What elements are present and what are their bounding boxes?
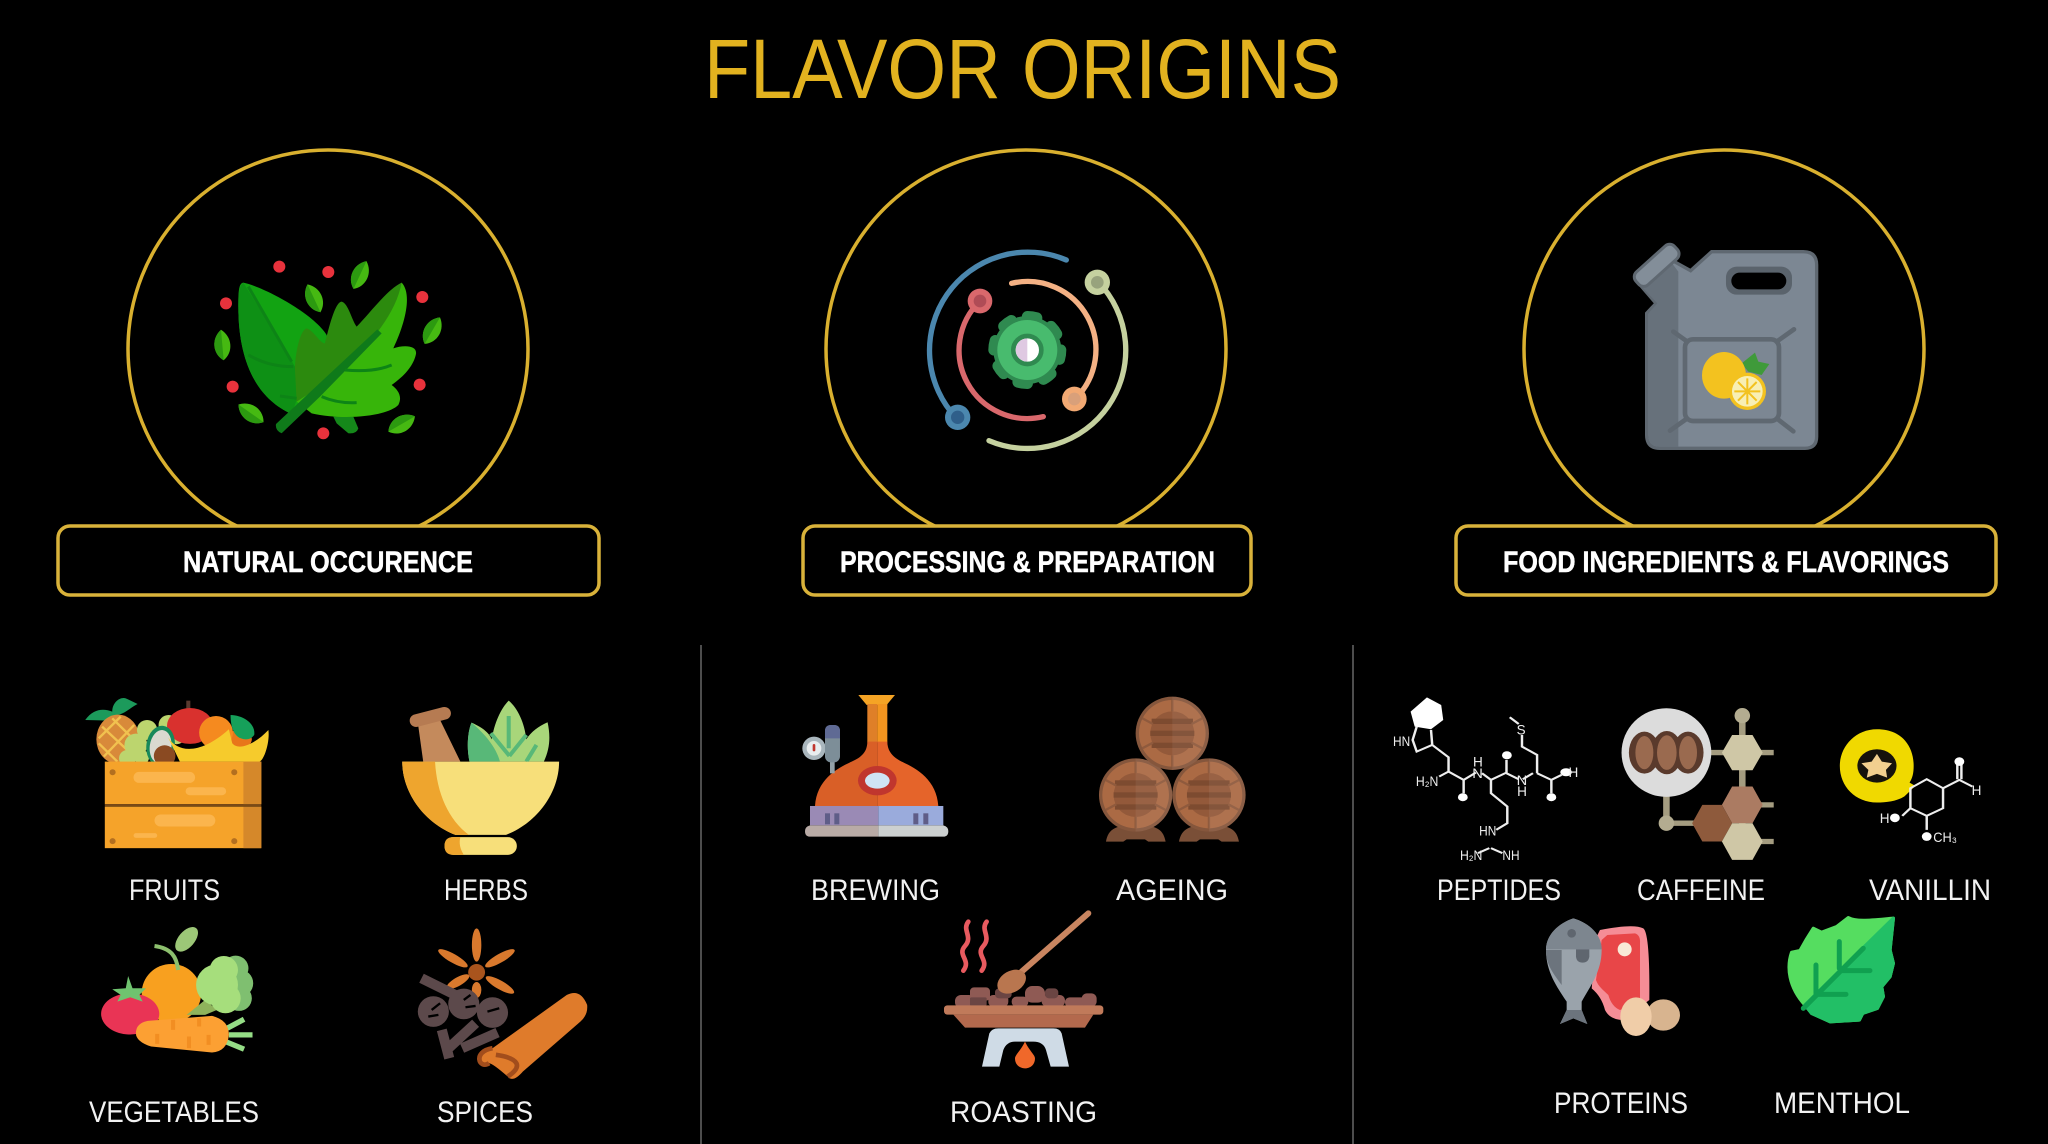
icon: brewing kettle: [802, 695, 948, 837]
icon: roasting pan: [944, 913, 1103, 1068]
icon: peptide molecule: N: [1517, 773, 1527, 788]
title: FLAVOR ORIGINS: [704, 22, 1341, 116]
icon: ageing barrels: [1099, 697, 1246, 842]
icon: peptide molecule: HN: [1393, 734, 1410, 750]
icon: peptide molecule: H₂N: [1460, 849, 1482, 864]
category label: processing and preparation: [803, 526, 1251, 595]
category label: food ingredients and flavorings: [1456, 526, 1996, 595]
icon: peptide molecule: H₂N: [1416, 774, 1438, 789]
icon: spices: [418, 928, 587, 1079]
icon: jerry can with lemon: [1632, 241, 1817, 448]
label: brewing: BREWING: [811, 874, 940, 907]
label: ageing: AGEING: [1116, 874, 1228, 907]
group: natural occurence items: [85, 698, 587, 1129]
label: caffeine: CAFFEINE: [1637, 874, 1765, 907]
label: spices: SPICES: [437, 1096, 533, 1129]
icon: herbs mortar: [402, 701, 559, 855]
icon: peptide molecule: H: [1473, 755, 1483, 770]
icon: vanillin: H: [1972, 783, 1981, 798]
category label: processing and preparation: PROCESSING & PREPARATION: [840, 546, 1215, 579]
icon: gear and orbit rings: [930, 252, 1126, 448]
icon: menthol leaf: [1789, 918, 1893, 1022]
group: food ingredient items: [1393, 697, 1991, 1120]
icon: peptide molecule: HN: [1479, 824, 1496, 839]
icon: peptide molecule: S: [1517, 723, 1526, 738]
panel: processing and preparation: [803, 150, 1251, 595]
panel: natural occurence: [58, 150, 599, 595]
label: herbs: HERBS: [444, 874, 528, 907]
circle outline: [826, 150, 1226, 548]
group: processing items: [802, 695, 1246, 1129]
circle outline: [128, 150, 528, 548]
label: fruits: FRUITS: [129, 874, 220, 907]
label: menthol: MENTHOL: [1774, 1087, 1910, 1120]
label: peptides: PEPTIDES: [1437, 874, 1561, 907]
panel: food ingredients and flavorings: [1456, 150, 1996, 595]
icon: peptide molecule: [1393, 697, 1578, 864]
category label: food ingredients and flavorings: FOOD INGREDIENTS & FLAVORINGS: [1503, 546, 1949, 579]
label: vegetables: VEGETABLES: [89, 1096, 259, 1129]
label: roasting: ROASTING: [950, 1096, 1097, 1129]
circle outline: [1524, 150, 1924, 548]
label: vanillin: VANILLIN: [1869, 874, 1991, 907]
label: proteins: PROTEINS: [1554, 1087, 1688, 1120]
icon: vegetables: [101, 923, 253, 1053]
icon: fruits crate: [85, 698, 269, 848]
category label: natural occurence: [58, 526, 599, 595]
icon: caffeine: [1622, 708, 1774, 860]
icon: proteins: [1546, 918, 1680, 1036]
icon: peptide molecule: H: [1517, 785, 1527, 800]
icon: leaves and berries: [213, 258, 447, 439]
icon: peptide molecule: NH: [1502, 849, 1520, 864]
icon: vanillin: H: [1880, 811, 1890, 826]
icon: peptide molecule: H: [1568, 765, 1578, 780]
icon: vanillin: CH₃: [1933, 830, 1957, 845]
icon: vanillin: [1840, 729, 1981, 845]
category label: natural occurence: NATURAL OCCURENCE: [183, 546, 473, 579]
icon: peptide molecule: N: [1472, 767, 1483, 782]
